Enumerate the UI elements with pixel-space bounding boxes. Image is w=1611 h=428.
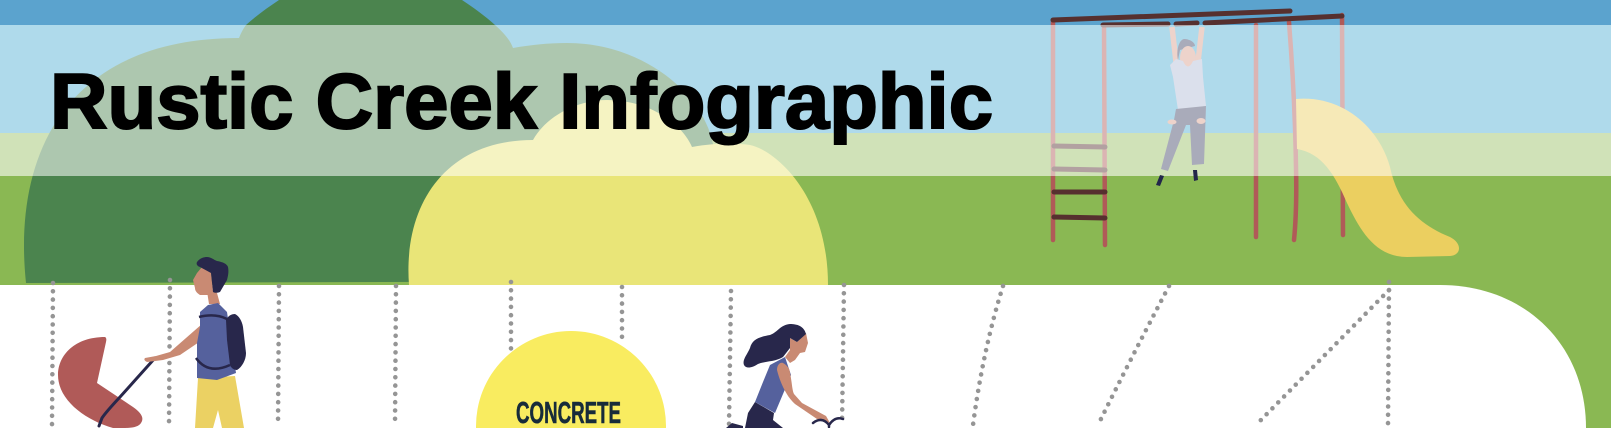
yellow hill	[408, 100, 828, 285]
hanging child on monkey bars	[1156, 27, 1206, 186]
trousers	[195, 376, 244, 428]
neck and face	[206, 285, 220, 304]
arm	[144, 324, 208, 362]
hair	[197, 257, 228, 293]
overhead bars	[1053, 11, 1342, 25]
slide	[1296, 99, 1459, 257]
man pushing stroller	[58, 257, 246, 428]
woman cycling	[726, 324, 843, 428]
hair	[744, 324, 806, 368]
posts	[1053, 15, 1343, 245]
face	[785, 333, 808, 363]
white ground path area	[0, 285, 1586, 428]
stroller handle	[99, 358, 155, 426]
stroller basket	[58, 337, 142, 428]
title: Rustic Creek Infographic	[50, 57, 993, 145]
concrete circle badge	[476, 331, 666, 428]
legs	[745, 402, 783, 428]
shirt	[197, 303, 236, 380]
shoe	[726, 423, 743, 428]
arm	[777, 363, 830, 423]
top	[755, 357, 791, 413]
ladder rungs	[1054, 146, 1105, 218]
playground: monkey bars and ladder	[1053, 11, 1343, 245]
dotted path lines	[52, 280, 1389, 425]
handlebar	[813, 418, 843, 427]
dark green hill	[24, 0, 723, 283]
translucent haze band	[0, 25, 1611, 176]
backpack	[226, 314, 246, 370]
backpack straps	[196, 315, 230, 369]
